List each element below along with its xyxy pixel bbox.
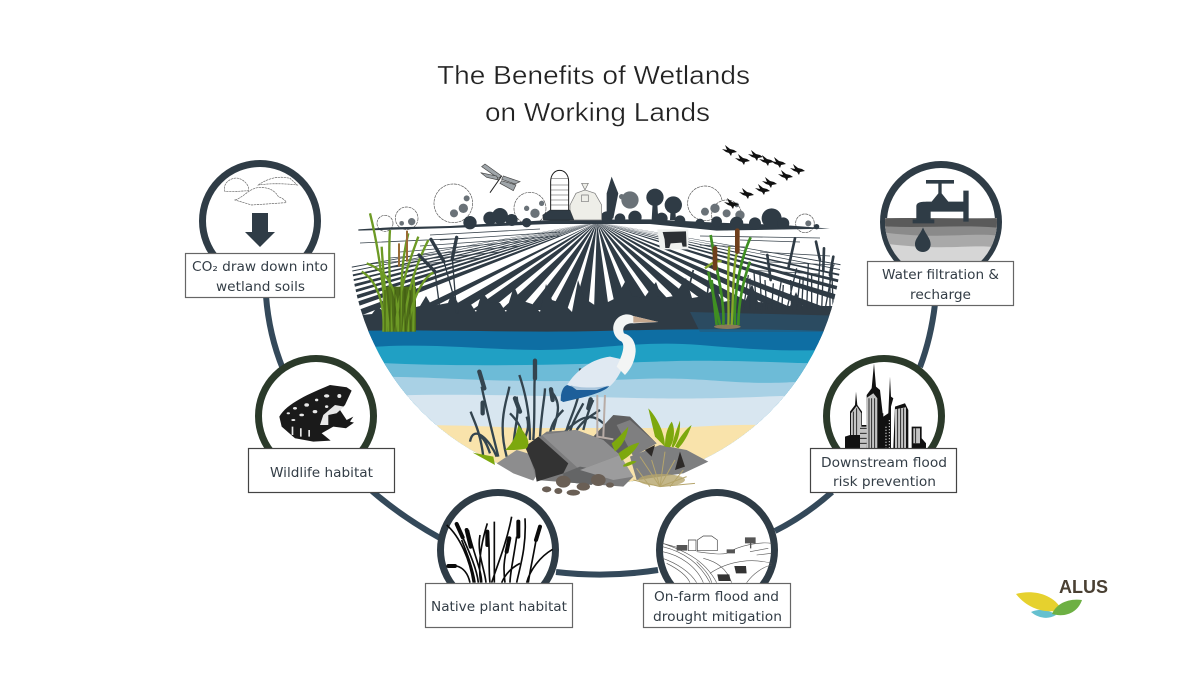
ALUS logo: ALUS [1059,577,1108,597]
label: wetland soils [216,280,305,295]
icon: frog [279,385,354,442]
title: The Benefits of Wetlands [437,60,750,90]
treeline and farm [358,170,830,233]
label: drought mitigation [653,610,782,625]
label [810,448,956,492]
dark cattail grasses [470,368,603,457]
dry tussock [633,452,695,487]
central wetland scene [350,145,850,500]
dark tree mass and horizon [358,177,830,231]
label [248,448,394,492]
green cattail clump right [705,231,751,329]
label: CO₂ draw down into [192,260,328,275]
label: Native plant habitat [431,600,567,615]
ring [440,492,556,608]
label [186,254,334,298]
ring [826,358,942,474]
cow [657,229,688,249]
hatched crowns [399,191,811,226]
label: Water filtration & [882,268,999,283]
ring [884,164,998,280]
heron wing tips [561,385,609,402]
outlined trees [377,184,814,233]
benefit: native plant habitat [426,492,572,628]
icon: cattails [447,517,553,583]
heron legs [597,395,613,439]
farm field and furrows [350,222,850,500]
icon: clouds [224,177,297,205]
tractor shed [543,210,574,220]
icon: farm landscape [663,536,772,583]
icon: city skyline [845,363,926,448]
benefit: downstream flood risk prevention [810,358,956,492]
connecting ring segments [266,296,935,575]
dark shadow band [350,276,850,340]
icon: groundwater layers [885,218,997,261]
ring [258,358,374,474]
ring [202,164,318,278]
barn [570,183,602,220]
icon: tap and drop [913,180,969,252]
title [437,60,750,127]
green leaves [473,408,692,467]
water bands [368,329,824,484]
benefit: water filtration and recharge [868,164,1014,306]
ring [660,492,774,608]
flock of birds [722,145,805,209]
label: risk prevention [833,475,936,490]
silo [551,170,569,212]
label [426,584,572,628]
label: recharge [910,288,971,303]
green reeds left with cattails [362,213,458,332]
label [868,262,1014,306]
dark reeds right [671,237,835,306]
pebbles [542,474,614,496]
label: Wildlife habitat [270,466,373,481]
ALUS logo [1016,577,1108,618]
benefit: wildlife habitat [248,358,394,492]
label: Downstream flood [821,456,947,471]
rocks [593,415,657,457]
dragonfly [481,164,520,193]
benefit: on-farm flood and drought mitigation [644,492,790,628]
title: on Working Lands [485,97,710,127]
heron body [562,357,625,400]
label [644,584,790,628]
heron neck and head [613,314,658,375]
icon: down arrow [245,213,275,247]
label: On-farm flood and [654,590,779,605]
heron and foreground plants [470,314,708,496]
benefit: CO2 draw down [186,164,334,298]
